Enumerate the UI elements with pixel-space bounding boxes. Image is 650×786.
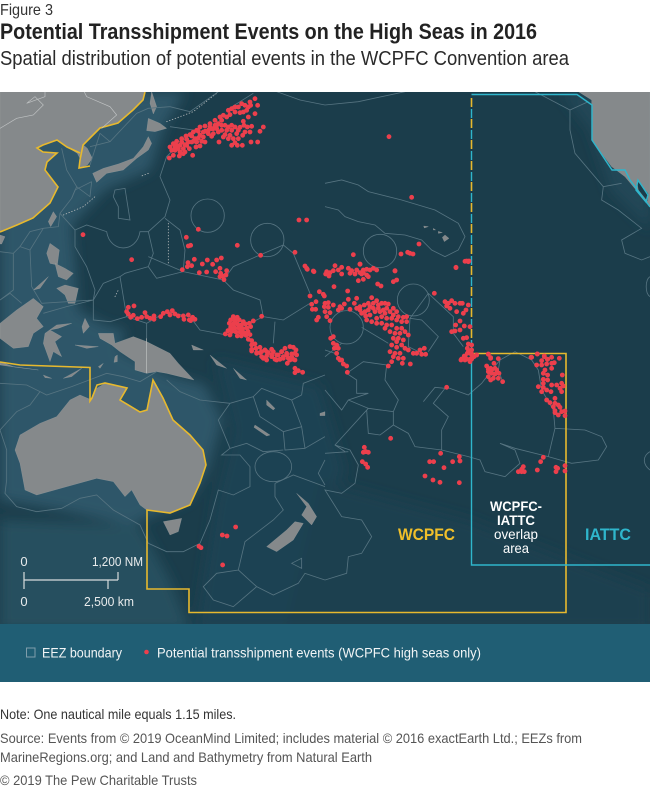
bathymetry shading: [0, 92, 650, 630]
dots: north of central Pacific cluster: [353, 137, 559, 359]
land: Southeast Asia and New Guinea: [0, 243, 203, 380]
scale bar: 0: [20, 594, 28, 609]
dots: north Pacific cluster: [169, 99, 263, 158]
scale bar: 0: [20, 554, 28, 569]
EEZ: South Pacific: [325, 350, 650, 580]
note: Note: One nautical mile equals 1.15 miles.: [0, 706, 236, 722]
island speckles: [63, 93, 217, 297]
land: North America and Hawaii: [424, 90, 650, 242]
source: [0, 730, 582, 765]
land: Australia and New Zealand: [15, 355, 325, 552]
dots: South Pacific and overlap area: [362, 352, 565, 483]
dots: western Pacific: [83, 220, 314, 359]
region label: overlap area: area: [503, 540, 529, 556]
land masses: [0, 90, 650, 552]
subtitle: Spatial distribution of potential events in the WCPFC Convention area: [0, 48, 570, 70]
potential transshipment event dots: [83, 99, 565, 565]
region label: overlap area: [490, 502, 542, 553]
map: [0, 90, 650, 630]
legend band: [0, 624, 650, 682]
ocean background: [0, 92, 650, 624]
WCPFC convention boundary: [0, 92, 566, 612]
EEZ boundaries: [0, 92, 650, 607]
region label: overlap area: IATTC: [497, 512, 535, 528]
region label: overlap area: overlap: [494, 526, 538, 542]
scale bar: 2,500 km: [84, 594, 134, 609]
dots: central Pacific cluster: [307, 261, 472, 372]
region label: WCPFC: WCPFC: [398, 525, 455, 544]
region label: IATTC: IATTC: [585, 525, 631, 544]
source: MarineRegions.org; and Land and Bathymetry from Natural Earth: [0, 749, 372, 765]
land: East Asia and Japan: [0, 90, 167, 244]
EEZ: Australia and New Zealand: [0, 372, 325, 607]
dots: Tasman Sea and Solomon Sea: [199, 351, 303, 565]
legend: EEZ boundary: EEZ boundary: [42, 644, 122, 660]
scale bar: [20, 554, 143, 609]
EEZ: central Pacific and Hawaii: [325, 92, 650, 357]
IATTC convention boundary: [472, 94, 650, 565]
title: Potential Transshipment Events on the High Seas in 2016: [0, 19, 537, 44]
land borders: [0, 90, 147, 373]
EEZ: north-west Pacific: [0, 92, 325, 343]
region label: overlap area: WCPFC-: [490, 498, 542, 514]
figure label: Figure 3: [0, 2, 53, 19]
legend: potential transshipment events: Potential transshipment events (WCPFC high seas only): [157, 644, 481, 660]
scale bar: 1,200 NM: [92, 554, 143, 569]
source: Source: Events from © 2019 OceanMind Limited; includes material © 2016 exactEarth Ltd.; EEZs from: [0, 730, 582, 746]
